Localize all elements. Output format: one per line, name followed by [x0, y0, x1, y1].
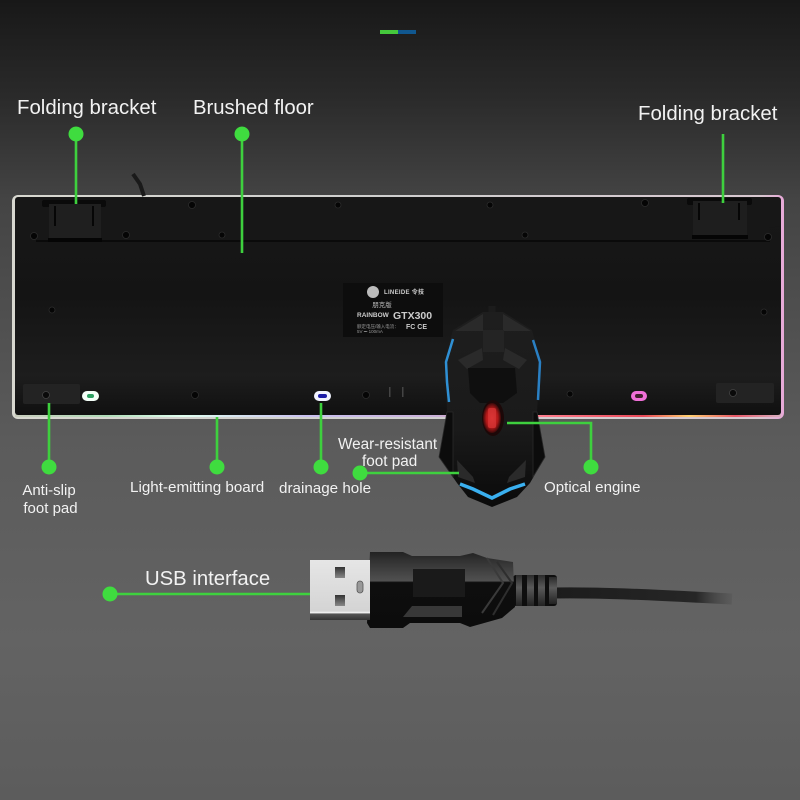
ridged grip [482, 558, 512, 615]
mouse body [439, 312, 545, 507]
blue LED right [533, 340, 540, 400]
product label sticker: RAINBOW [357, 312, 390, 319]
foot pad top [468, 368, 517, 403]
raised top rail [16, 198, 780, 241]
product label sticker: FC CE [406, 324, 427, 331]
callout: folding bracket left: Folding bracket [17, 97, 157, 119]
shell slots [335, 567, 363, 606]
product label sticker: 额定电压/输入电流： [357, 323, 399, 330]
callout: folding bracket right [638, 103, 778, 203]
keyboard frame [12, 195, 784, 419]
plug housing [367, 552, 515, 628]
optical sensor [482, 400, 504, 436]
top panels [455, 314, 483, 331]
product label sticker: 5V ⎓ 100mA [357, 329, 383, 334]
product label sticker: GTX300 [393, 310, 432, 322]
product label sticker: 朋克版 [372, 300, 392, 309]
small slots [389, 387, 404, 397]
drainage hole: blue [314, 391, 331, 401]
drainage hole: pink [631, 391, 647, 401]
callout: brushed floor [193, 97, 314, 253]
metal shell [310, 560, 370, 620]
mid panels [458, 348, 483, 369]
top accent bar [380, 30, 416, 34]
callout: anti-slip foot pad: foot pad [23, 500, 78, 517]
anti-slip pad right [716, 383, 774, 403]
right folding bracket [687, 198, 752, 239]
callout: optical engine [507, 423, 640, 496]
drainage hole: green [82, 391, 99, 401]
anti-slip pad left [23, 384, 80, 404]
callout: folding bracket right: Folding bracket [638, 103, 778, 125]
strain relief [513, 575, 557, 606]
callout: usb interface: USB interface [145, 568, 270, 590]
rear foot pads [457, 460, 475, 483]
callout: drainage hole: drainage hole [279, 480, 371, 497]
callout: anti-slip foot pad [22, 403, 78, 517]
mouse cable [488, 306, 496, 332]
usb connector [310, 552, 732, 628]
cable channel [483, 330, 504, 352]
blue LED left [446, 339, 453, 402]
rear cable stub [133, 174, 144, 196]
callout: wear-resistant foot pad: Wear-resistant [338, 436, 438, 453]
cable [552, 593, 732, 599]
callout: folding bracket left [17, 97, 157, 204]
lower highlight block [403, 606, 462, 617]
callout: drainage hole [279, 403, 371, 497]
light-emitting strip [15, 414, 781, 417]
callout: brushed floor: Brushed floor [193, 97, 314, 119]
housing logo recess [413, 569, 465, 597]
blue LED bottom [460, 484, 525, 498]
callout: wear-resistant foot pad: foot pad [362, 453, 417, 470]
callout: light-emitting board: Light-emitting board [130, 479, 264, 496]
callout: wear-resistant foot pad [338, 436, 459, 480]
left folding bracket [42, 200, 106, 242]
product label sticker: LINEIDE 令技 [384, 288, 424, 296]
keyboard underside [12, 174, 784, 419]
brushed base plate [15, 197, 781, 415]
callout: optical engine: Optical engine [544, 479, 640, 496]
callout: usb interface [102, 568, 310, 602]
screws [30, 200, 772, 398]
callout: light-emitting board [130, 417, 264, 496]
product label sticker [343, 283, 443, 337]
side wings [439, 412, 453, 477]
mouse [439, 306, 545, 507]
callout: anti-slip foot pad: Anti-slip [22, 482, 76, 499]
